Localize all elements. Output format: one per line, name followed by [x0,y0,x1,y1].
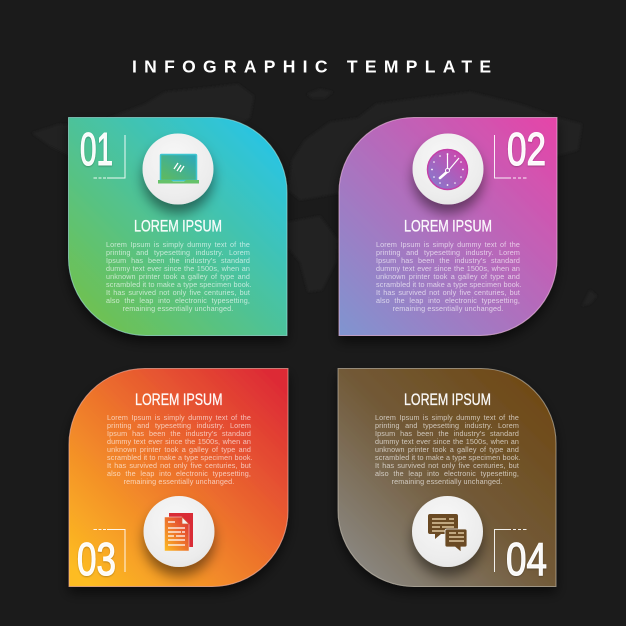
body text: It has survived not only five centuries, but [376,288,520,297]
body text: dummy text ever since the 1500s, when an [106,264,250,273]
panel: 02 [339,118,557,336]
world map [32,84,597,306]
body text: dummy text ever since the 1500s, when an [376,264,520,273]
body text: unknown printer took a galley of type and [107,445,251,454]
body text: printing and typesetting industry. Lorem [375,421,519,430]
body text: Ipsum has been the industry's standard [375,429,519,438]
body text: printing and typesetting industry. Lorem [376,248,520,257]
body text: remaining essentially unchanged. [124,477,234,486]
icon disc: chat [412,496,483,567]
body text [107,414,252,490]
number 01: 01 [80,123,113,175]
body text: scrambled it to make a type specimen book. [376,280,521,289]
body text: printing and typesetting industry. Lorem [106,248,250,257]
panel: 01 [68,118,287,336]
body text: It has survived not only five centuries, but [106,288,250,297]
icon: chat bubbles [428,514,467,552]
icon: laptop [158,154,199,184]
icon disc: document [144,496,214,567]
body text: Ipsum has been the industry's standard [107,429,251,438]
heading: LOREM IPSUM [404,218,492,236]
body text: unknown printer took a galley of type and [106,272,250,281]
body text: It has survived not only five centuries, but [107,461,251,470]
body text: dummy text ever since the 1500s, when an [375,437,519,446]
body text [375,414,520,490]
icon: clock [428,150,468,190]
heading: LOREM IPSUM [135,391,222,409]
body text: scrambled it to make a type specimen book. [107,453,252,462]
body text: It has survived not only five centuries, but [375,461,519,470]
panel: 03 [69,368,288,586]
bracket 02 [494,135,526,178]
body text: Ipsum has been the industry's standard [106,256,250,265]
icon: documents [164,513,193,551]
body text: remaining essentially unchanged. [123,304,233,313]
body text: printing and typesetting industry. Lorem [107,421,251,430]
bracket 04 [494,530,526,572]
body text: dummy text ever since the 1500s, when an [107,437,251,446]
number 04: 04 [506,533,547,585]
body text: also the leap into electronic typesetting, [106,296,250,305]
body text: remaining essentially unchanged. [393,304,503,313]
heading: LOREM IPSUM [134,218,222,236]
panel: 04 [338,368,556,586]
body text: unknown printer took a galley of type and [376,272,520,281]
bracket 03 [94,530,125,572]
heading: LOREM IPSUM [404,391,491,409]
body text [376,240,521,316]
body text [106,240,251,316]
icon disc: laptop [142,134,214,204]
body text: scrambled it to make a type specimen book. [106,280,251,289]
icon disc: clock [412,134,484,204]
body text: Ipsum has been the industry's standard [376,256,520,265]
number 02: 02 [507,123,546,175]
body text: also the leap into electronic typesetting, [107,469,251,478]
bracket 01 [94,135,125,178]
body text: remaining essentially unchanged. [392,477,502,486]
body text: also the leap into electronic typesetting, [376,296,520,305]
title: INFOGRAPHIC TEMPLATE [132,56,491,76]
body text: unknown printer took a galley of type and [375,445,519,454]
number 03: 03 [77,533,116,585]
body text: also the leap into electronic typesetting, [375,469,519,478]
body text: scrambled it to make a type specimen book. [375,453,520,462]
